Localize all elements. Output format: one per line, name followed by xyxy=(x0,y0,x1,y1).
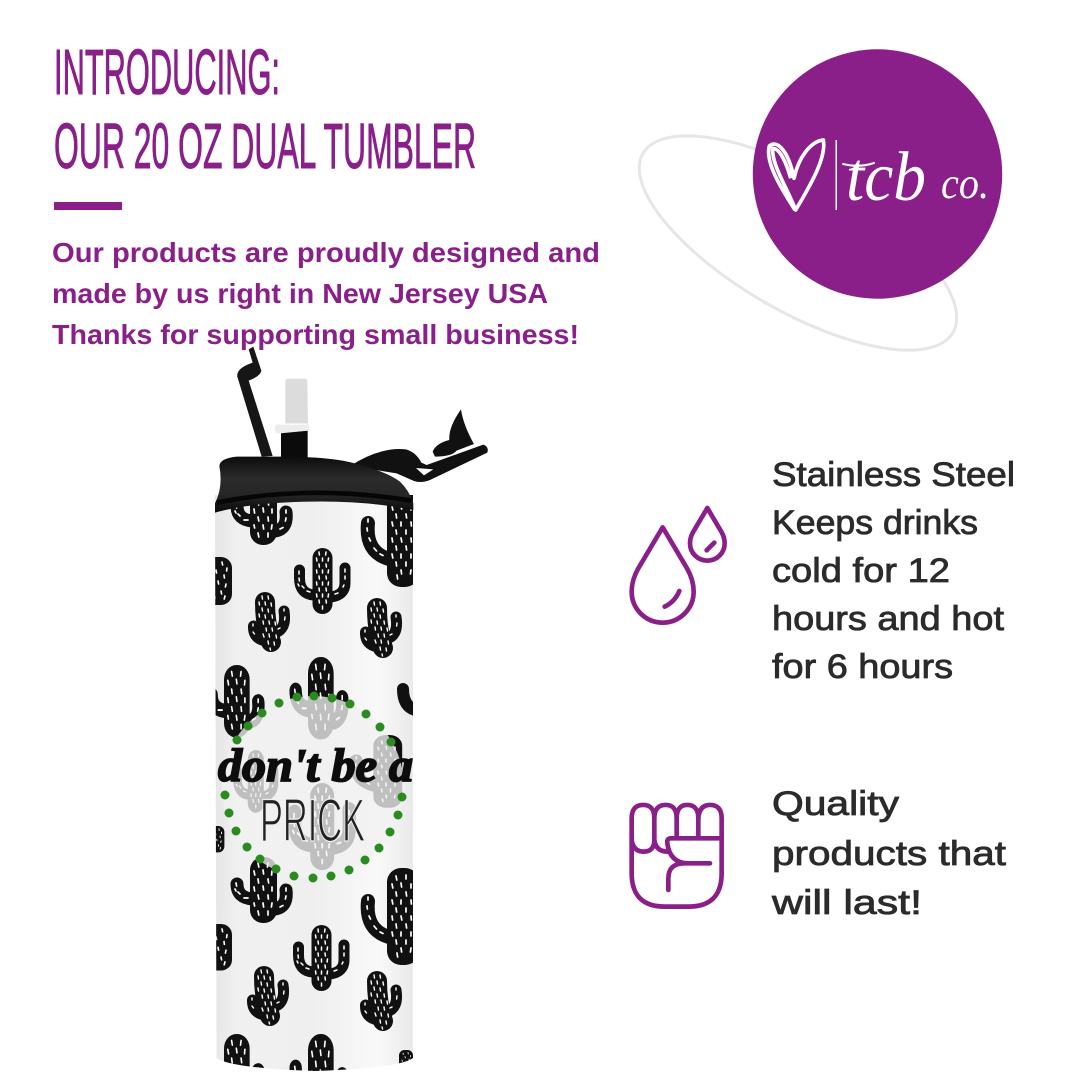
tumbler product image xyxy=(204,347,1015,1080)
title: introducing our dual tumbler: INTRODUCING: xyxy=(54,36,280,108)
print text: don't be a prick: don't be a xyxy=(218,740,413,792)
print text: don't be a prick: PRICK xyxy=(260,787,365,854)
dotted green circle xyxy=(220,692,406,882)
feature text: stainless steel: for 6 hours xyxy=(772,648,953,686)
logo: tcb co. badge with orbit ring: co. xyxy=(941,159,989,208)
icon: raised fist xyxy=(632,805,722,907)
heading accent rule xyxy=(54,202,122,210)
feature text: stainless steel: hours and hot xyxy=(772,600,1005,638)
tumbler body with cactus print xyxy=(215,495,413,1071)
feature text: quality: will last! xyxy=(771,884,922,922)
print text: don't be a prick xyxy=(218,740,413,854)
icon: water drops xyxy=(632,508,725,623)
flip handle xyxy=(237,347,273,457)
straw xyxy=(275,379,309,458)
feature text: stainless steel xyxy=(772,456,1015,686)
notch in spout cap xyxy=(416,468,433,475)
title: introducing our dual tumbler xyxy=(54,36,476,182)
feature text: stainless steel: Keeps drinks xyxy=(772,504,978,542)
feature text: stainless steel: cold for 12 xyxy=(772,552,950,590)
intro text block: made by us right in New Jersey USA xyxy=(52,278,548,309)
feature text: quality: Quality xyxy=(772,785,899,823)
intro text block: Our products are proudly designed and xyxy=(52,237,600,268)
feature text: quality xyxy=(771,785,1007,922)
tumbler lid, straw and flip caps xyxy=(215,347,488,513)
logo: tcb co. badge with orbit ring xyxy=(609,49,1002,391)
feature text: stainless steel: Stainless Steel xyxy=(772,456,1015,494)
intro text block xyxy=(52,237,600,350)
spout cap xyxy=(350,409,488,482)
logo: tcb co. badge with orbit ring: tcb xyxy=(846,139,926,216)
intro text block: Thanks for supporting small business! xyxy=(52,319,579,350)
feature text: quality: products that xyxy=(772,835,1007,873)
lid xyxy=(215,457,413,513)
text: OUR 20 OZ DUAL TUMBLER xyxy=(54,110,476,182)
